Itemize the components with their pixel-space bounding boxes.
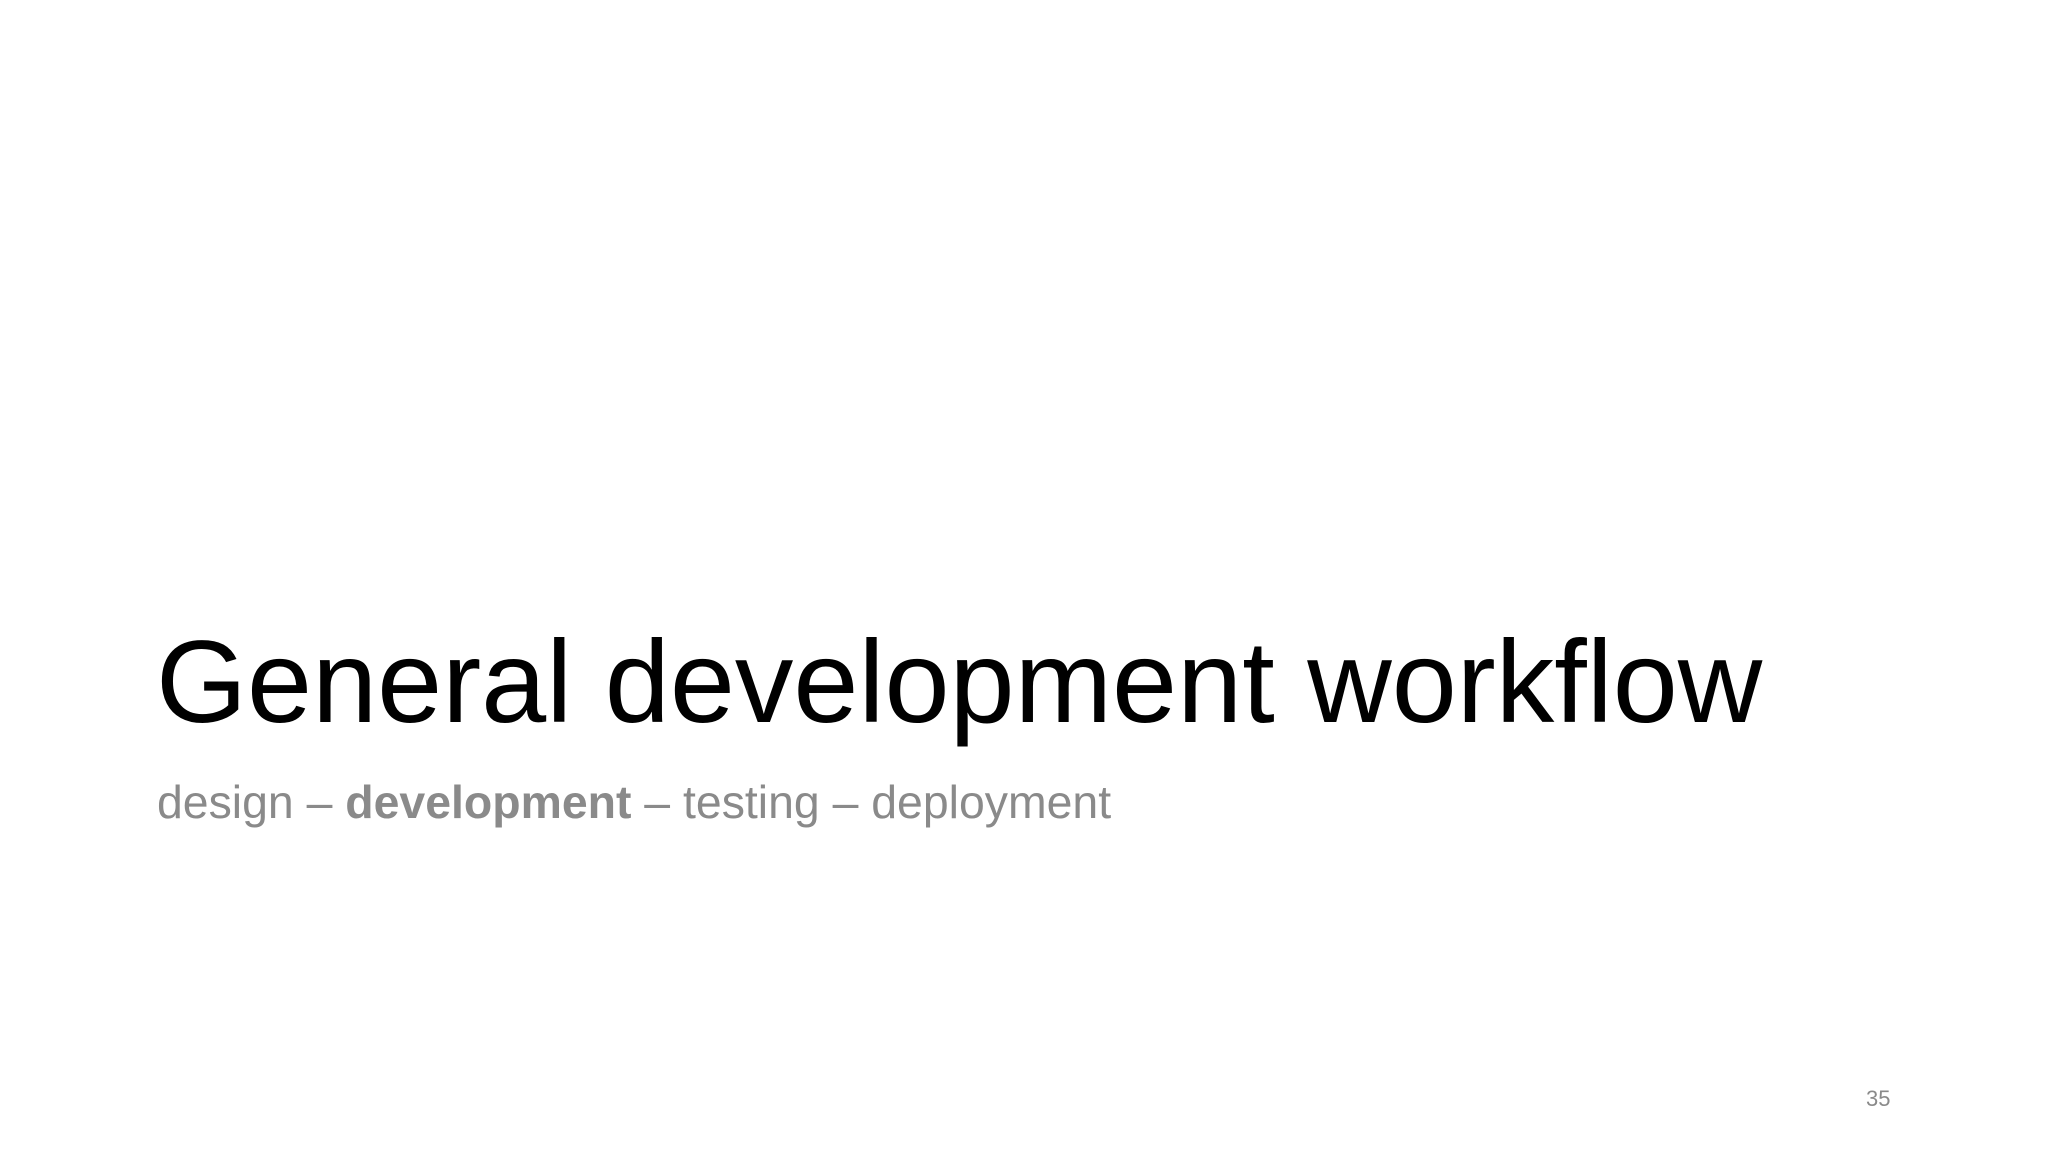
page number: 35 xyxy=(1866,1086,1890,1111)
title: General development workflow xyxy=(156,616,1762,747)
subtitle: design – development – testing – deployment xyxy=(157,776,1111,828)
